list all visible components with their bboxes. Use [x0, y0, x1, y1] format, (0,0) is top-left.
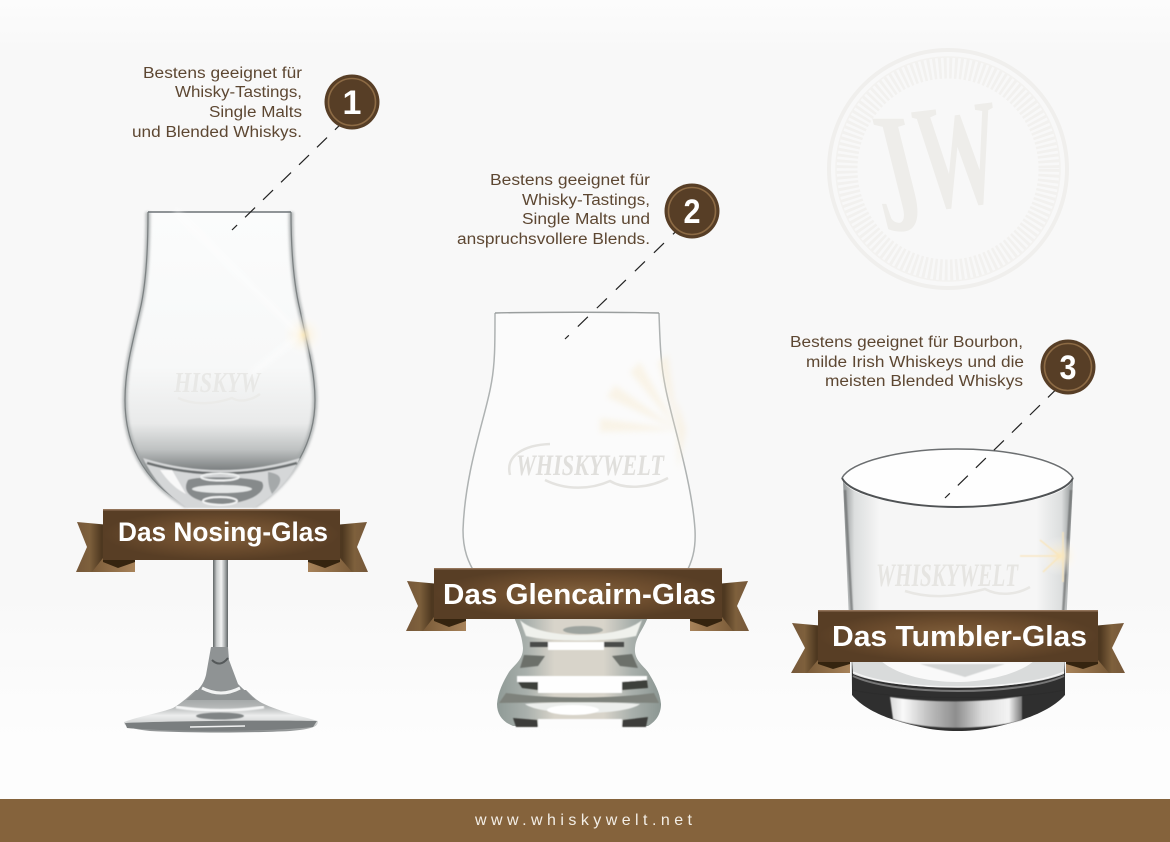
etched logo: HISKYW — [173, 368, 262, 399]
ribbon label: Das Tumbler-Glas — [832, 621, 1087, 653]
ribbon label: Das Nosing-Glas — [118, 517, 328, 547]
dashed pointer lines — [232, 120, 1076, 498]
ribbon: Das Tumbler-Glas — [791, 610, 1125, 673]
light flare — [1020, 532, 1080, 582]
etched logo — [509, 444, 668, 488]
text block 1 — [132, 65, 302, 141]
light flare — [175, 210, 325, 375]
ribbon folds — [807, 660, 850, 673]
foot collar — [186, 647, 256, 700]
pointer 1 — [232, 120, 345, 230]
base highlight — [890, 696, 1022, 728]
badge 2 — [664, 184, 720, 238]
text block 3: Bestens geeignet für Bourbon, — [790, 334, 1023, 351]
badge 3: 3 — [1060, 349, 1076, 387]
text block 1: Single Malts — [209, 104, 302, 121]
bowl edge — [463, 313, 695, 575]
text block 3: milde Irish Whiskeys und die — [806, 354, 1024, 371]
ribbon body — [103, 509, 340, 560]
etched logo — [876, 558, 1030, 596]
ribbon tails — [76, 522, 110, 572]
text block 2: Single Malts und — [522, 211, 650, 228]
badge 1 — [324, 74, 380, 130]
text block 2 — [457, 172, 650, 248]
glass 1: nosing glass — [124, 210, 325, 732]
soft bowl edge — [125, 212, 315, 506]
badge 3 — [1040, 340, 1096, 394]
bowl base reflections — [143, 458, 300, 508]
stem and foot — [497, 617, 661, 726]
watermark logo badge: J — [846, 79, 943, 267]
text block 3 — [790, 334, 1024, 390]
stem — [213, 555, 228, 650]
foot — [124, 690, 318, 732]
text block 2: Bestens geeignet für — [490, 172, 650, 189]
glass 2: glencairn glass — [463, 312, 695, 728]
ribbon body — [434, 568, 722, 619]
ribbon body — [818, 610, 1098, 662]
badge 1: 1 — [343, 84, 361, 122]
etched logo: WHISKYWELT — [876, 558, 1019, 594]
pointer 2 — [565, 225, 683, 339]
ribbon label: Das Glencairn-Glas — [443, 579, 716, 611]
text block 1: und Blended Whiskys. — [132, 124, 302, 141]
ribbon tails — [406, 581, 440, 631]
rim — [148, 211, 291, 213]
watermark logo badge — [829, 50, 1067, 288]
ribbon: Das Glencairn-Glas — [406, 568, 749, 631]
footer url: www.whiskywelt.net — [474, 812, 693, 829]
ribbon: Das Nosing-Glas — [76, 509, 368, 572]
pointer 3 — [945, 370, 1076, 498]
bowl — [125, 212, 315, 506]
text block 1: Whisky-Tastings, — [175, 84, 302, 101]
light flare — [600, 355, 686, 470]
rim — [495, 311, 659, 314]
ribbon tails — [791, 623, 825, 673]
watermark logo badge: W — [906, 68, 1009, 243]
ribbon folds — [423, 617, 466, 631]
text block 1: Bestens geeignet für — [143, 65, 302, 82]
bowl — [463, 313, 695, 575]
glass base — [852, 660, 1065, 731]
ribbon folds — [92, 558, 135, 572]
text block 2: anspruchsvollere Blends. — [457, 231, 650, 248]
body — [843, 480, 1073, 690]
badge 2: 2 — [684, 193, 700, 231]
text block 3: meisten Blended Whiskys — [825, 373, 1023, 390]
rim opening — [842, 449, 1072, 507]
text block 2: Whisky-Tastings, — [522, 192, 650, 209]
etched logo: WHISKYWELT — [516, 449, 665, 482]
footer bar — [0, 799, 1170, 842]
glass 3: tumbler glass — [842, 449, 1080, 731]
